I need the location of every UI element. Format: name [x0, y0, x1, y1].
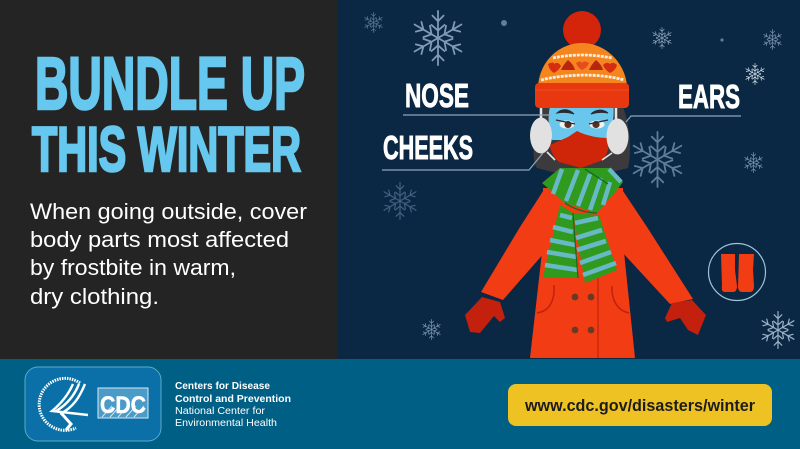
text block: organisation name: Centers for Disease	[175, 380, 270, 392]
winter hat	[535, 11, 629, 108]
face mask	[550, 131, 609, 168]
coat	[530, 188, 635, 358]
icon: CDC logo: CDC	[100, 392, 146, 419]
left arm and mitten	[465, 188, 545, 333]
label: cheeks: CHEEKS	[383, 129, 473, 166]
scarf	[542, 168, 623, 283]
title: BUNDLE UP	[35, 42, 305, 125]
title: THIS WINTER	[32, 115, 301, 185]
text block: advice: by frostbite in warm,	[30, 255, 236, 280]
face	[549, 100, 614, 140]
label: ears: EARS	[678, 78, 740, 115]
text block: organisation name: National Center for	[175, 405, 266, 417]
text block: advice	[30, 199, 307, 309]
label: nose: NOSE	[405, 77, 469, 114]
logo box: HHS and CDC	[25, 367, 161, 441]
right arm and mitten	[621, 188, 706, 335]
button: website url: www.cdc.gov/disasters/winter	[524, 397, 756, 415]
text block: advice: When going outside, cover	[30, 199, 307, 224]
panel: winter illustration background	[337, 0, 800, 359]
title	[32, 42, 305, 185]
icon: red boots	[708, 244, 766, 300]
hair	[534, 100, 630, 172]
text block: organisation name: Control and Prevention	[175, 393, 291, 405]
figure: person in winter clothes	[465, 11, 706, 358]
panel: left message background	[0, 0, 337, 359]
snowflakes	[363, 11, 796, 348]
button: website url	[508, 384, 772, 426]
footer band	[0, 359, 800, 449]
text block: organisation name: Environmental Health	[175, 417, 277, 429]
text block: organisation name	[175, 380, 291, 429]
earmuffs	[530, 105, 628, 160]
icon: HHS eagle seal	[39, 378, 88, 430]
label lines	[382, 115, 741, 170]
text block: advice: dry clothing.	[30, 284, 159, 309]
text block: advice: body parts most affected	[30, 227, 289, 252]
